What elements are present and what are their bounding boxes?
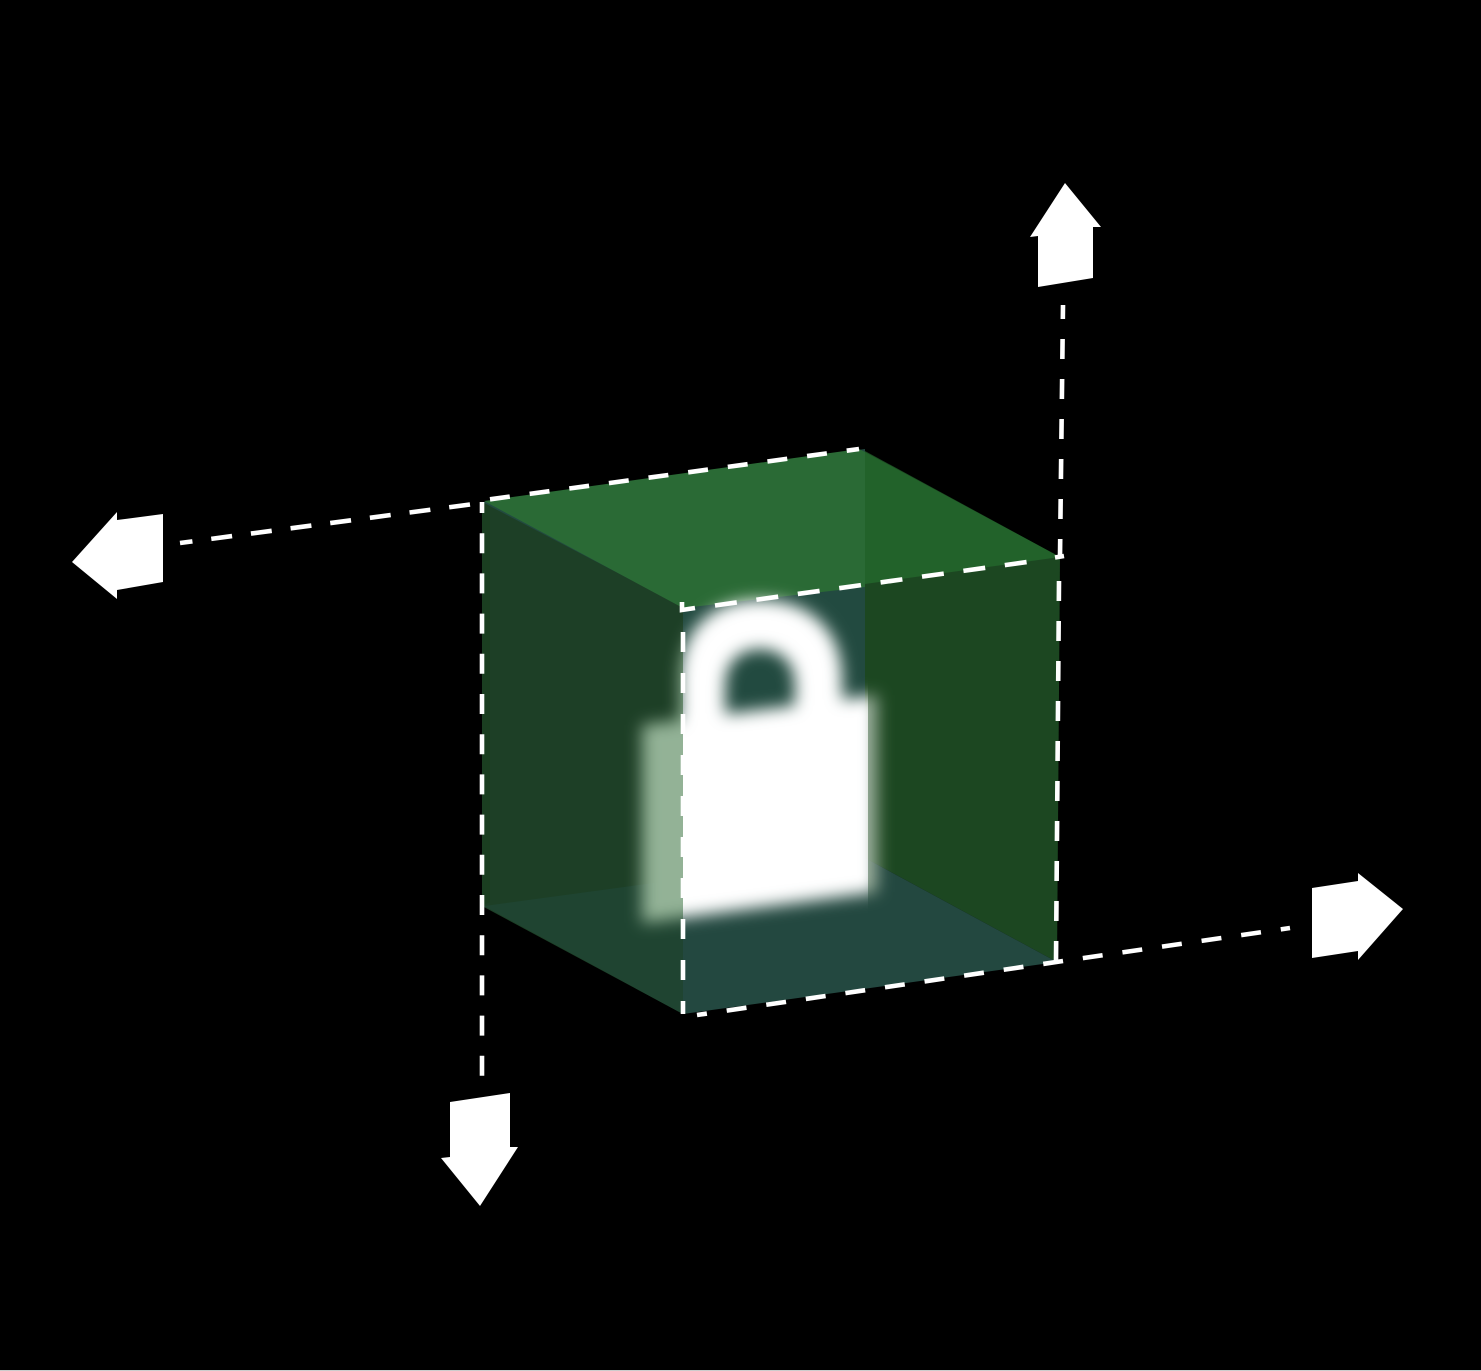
dashed line: back top edge: [490, 449, 859, 499]
padlock seen through left wall: [631, 628, 683, 932]
dashed line: left vertical to down arrow: [480, 502, 484, 1078]
padlock seen through right wall: [868, 685, 888, 904]
cube: translucent green faces: [482, 449, 1060, 1014]
cube top face, left part: [484, 449, 865, 608]
padlock centre: [683, 587, 868, 931]
dashed cube edges and axes: [180, 305, 1290, 1078]
arrow: left: [72, 512, 163, 599]
cube back wall: [484, 449, 865, 906]
dashed line: right vertical edge: [1056, 581, 1059, 961]
cube left wall: [482, 502, 683, 1014]
dashed line: front corner top: [682, 602, 695, 610]
arrow: right: [1312, 873, 1403, 960]
dashed line: bottom edge and axis to right arrow: [697, 928, 1290, 1015]
arrow: up: [1030, 183, 1101, 287]
dashed line: front vertical edge: [681, 632, 685, 1014]
icon: blurred padlock inside cube: [642, 600, 877, 923]
cube top face, right part: [865, 452, 1060, 584]
cube floor: [484, 858, 1057, 1014]
arrow: down: [441, 1093, 518, 1206]
cube right wall: [865, 451, 1060, 962]
left wall lower section over floor: [484, 879, 683, 1014]
dashed line: right corner top: [1055, 556, 1064, 558]
dashed line: axis to left arrow: [180, 504, 470, 543]
left wall edge strip: [482, 502, 490, 906]
bottom edge line: [0, 1370, 1481, 1371]
dashed line: axis to up arrow: [1060, 305, 1063, 556]
dashed line: front top edge: [715, 560, 1045, 606]
